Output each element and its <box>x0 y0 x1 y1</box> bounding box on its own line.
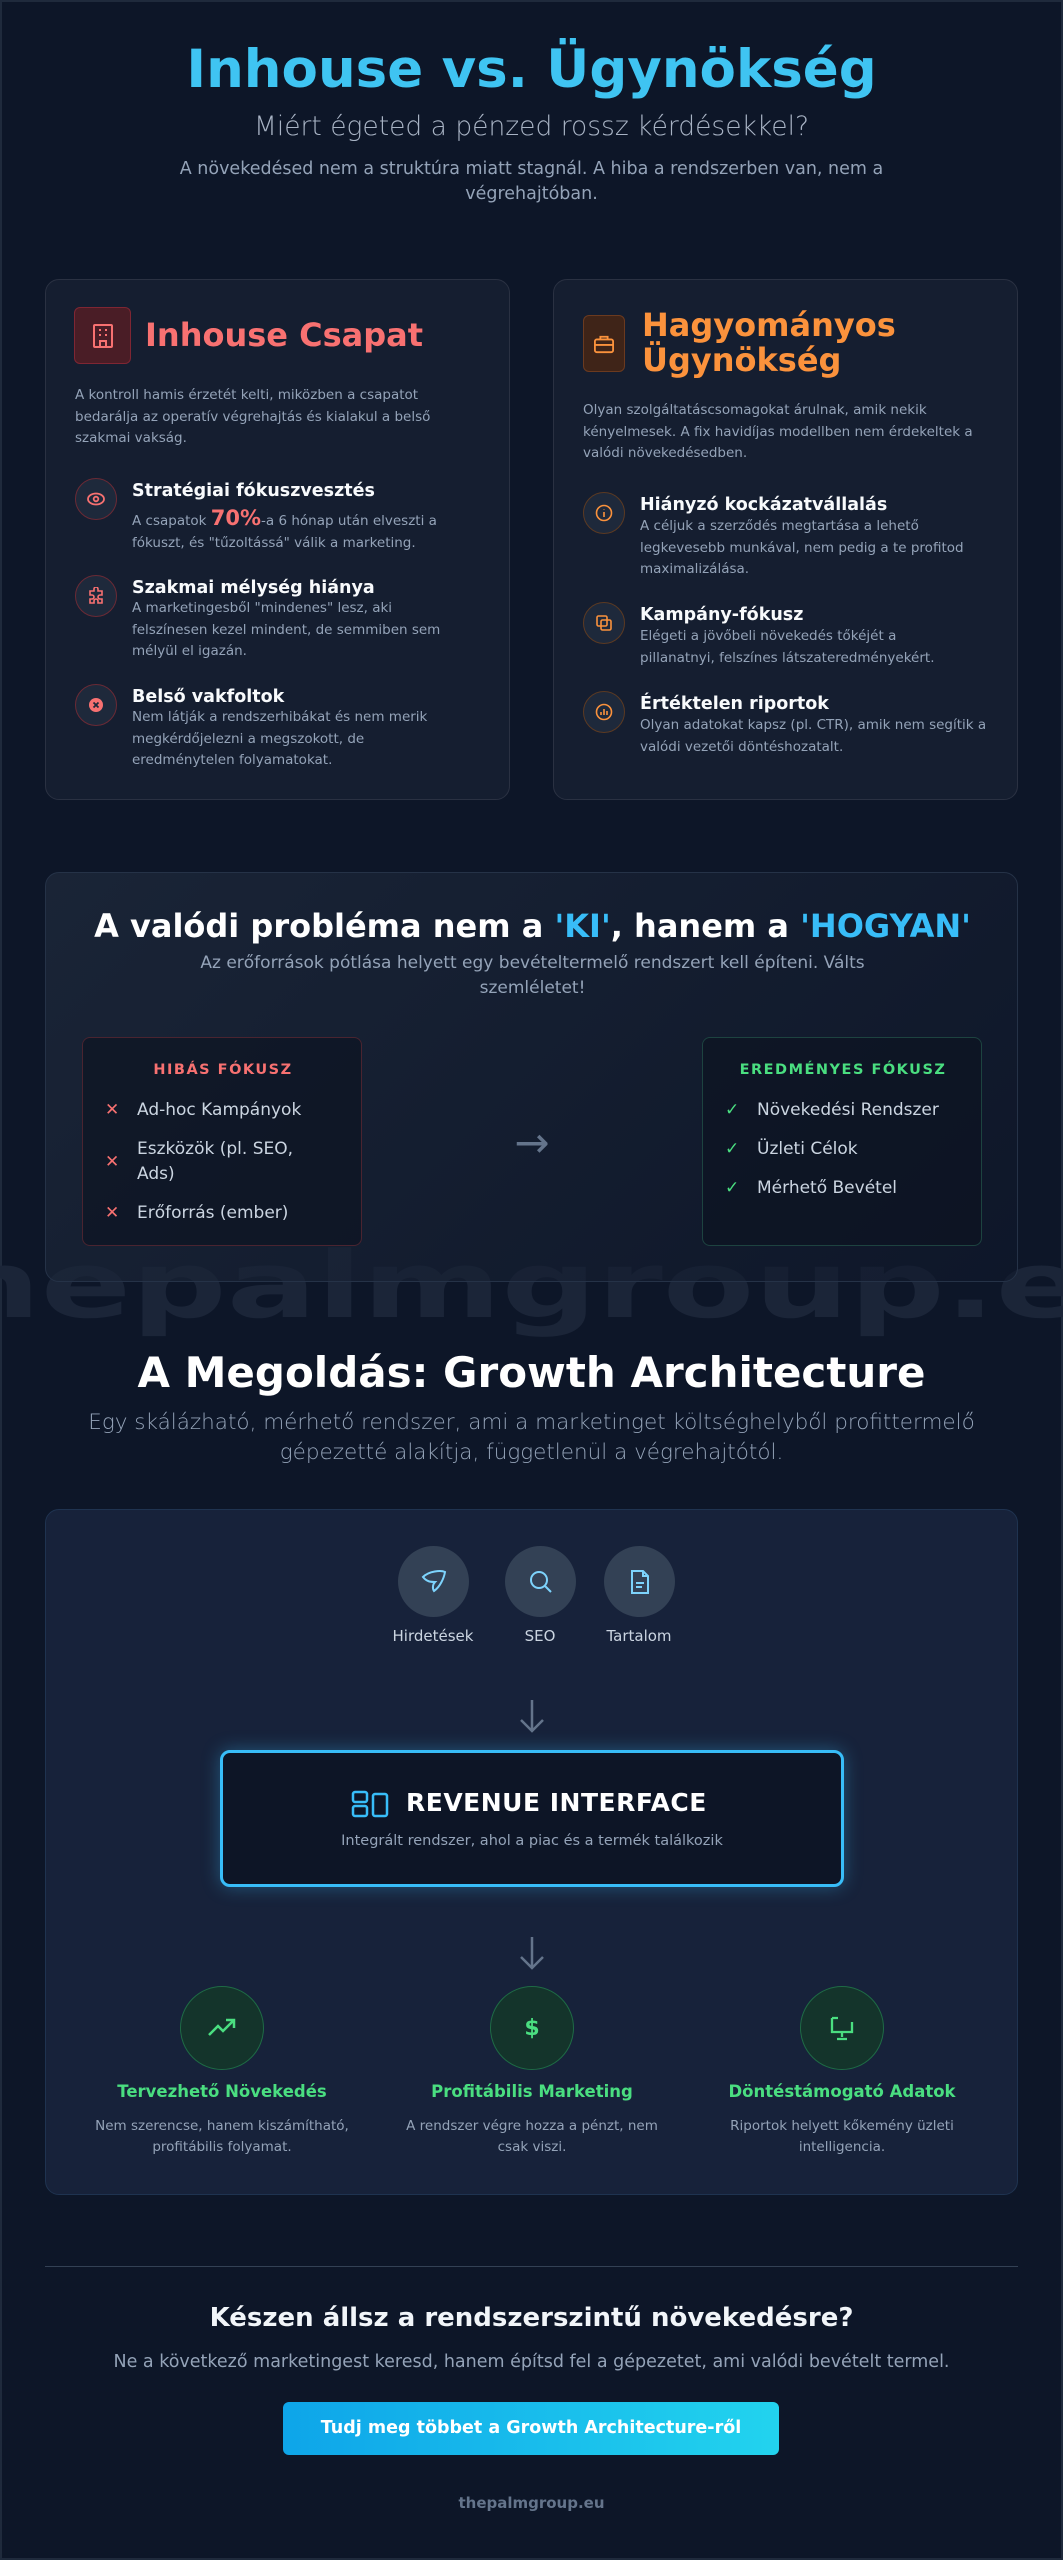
item: risk: Hiányzó kockázatvállalás <box>640 495 887 515</box>
box: wrong focus: Ad-hoc Kampányok <box>137 1100 301 1120</box>
item: risk <box>583 492 964 577</box>
icon: info <box>583 492 625 534</box>
revenue interface box <box>220 1750 844 1887</box>
box: effective focus: Mérhető Bevétel <box>757 1178 897 1198</box>
subtitle: Miért égeted a pénzed rossz kérdésekkel? <box>254 111 809 142</box>
icon: building <box>74 307 131 364</box>
result: profitable: A rendszer végre hozza a pénzt, nem csak viszi. <box>406 2118 658 2155</box>
panel: inhouse <box>45 279 510 800</box>
heading: Ügynökség <box>642 341 841 379</box>
icon: x circle <box>75 684 117 726</box>
heading: solution: A Megoldás: Growth Architecture <box>137 1348 926 1397</box>
box: wrong focus: Eszközök (pl. SEO, Ads) <box>137 1139 293 1184</box>
box: effective focus: EREDMÉNYES FÓKUSZ <box>740 1062 946 1078</box>
box: effective focus: Növekedési Rendszer <box>757 1100 939 1120</box>
result: profitable: Profitábilis Marketing <box>431 2082 633 2101</box>
subheading: Az erőforrások pótlása helyett egy bevételtermelő rendszert kell építeni. Válts szemléletet! <box>200 953 865 998</box>
item: blind spots: Nem látják a rendszerhibákat és nem merik megkérdőjelezni a megszokott, de eredménytelen folyamatokat. <box>132 709 427 768</box>
description: A kontroll hamis érzetét kelti, miközben a csapatot bedarálja az operatív végrehajtás és kialakul a belső szakmai vakság. <box>75 387 430 446</box>
cta heading: Készen állsz a rendszerszintű növekedésre? <box>210 2303 853 2333</box>
item: reports: Értéktelen riportok <box>640 694 829 714</box>
cta text: Ne a következő marketingest keresd, hanem építsd fel a gépezetet, ami valódi bevételt termel. <box>114 2352 950 2372</box>
cta button: Tudj meg többet a Growth Architecture-ről <box>321 2418 741 2438</box>
icon: ads <box>393 1546 474 1645</box>
item: campaign focus: Elégeti a jövőbeli növekedés tőkéjét a pillanatnyi, felszínes látszateredményekért. <box>640 628 934 666</box>
box: wrong focus: Erőforrás (ember) <box>137 1203 288 1223</box>
icon: puzzle <box>75 575 117 617</box>
icon: gauge <box>583 691 625 733</box>
item: campaign focus <box>583 602 934 666</box>
item: risk: A céljuk a szerződés megtartása a lehető legkevesebb munkával, nem pedig a te profitod maximalizálása. <box>640 518 964 577</box>
arrow: → <box>514 1118 550 1167</box>
item: blind spots <box>75 684 428 768</box>
box: wrong focus: ✕ <box>105 1152 119 1172</box>
item: strategic focus: Stratégiai fókuszvesztés <box>132 481 375 501</box>
icon: layout <box>352 1790 388 1818</box>
arrow down <box>520 1937 544 1970</box>
icon: seo: SEO <box>525 1627 555 1645</box>
item: professional depth: A marketingesből "mindenes" lesz, aki felszínesen kezel mindent, de semmiben sem mélyül el igazán. <box>132 600 440 659</box>
box: wrong focus: HIBÁS FÓKUSZ <box>153 1062 293 1078</box>
box: wrong focus: ✕ <box>105 1203 119 1223</box>
item: blind spots: Belső vakfoltok <box>132 687 284 707</box>
heading: Hagyományos <box>642 306 896 344</box>
panel: architecture diagram <box>45 1509 1018 2195</box>
box: effective focus: Üzleti Célok <box>757 1139 858 1159</box>
icon: content: Tartalom <box>606 1627 672 1645</box>
result: growth <box>95 1986 349 2155</box>
box: wrong focus: ✕ <box>105 1100 119 1120</box>
icon: content <box>604 1546 675 1645</box>
icon: copy <box>583 602 625 644</box>
item: strategic focus <box>75 478 437 550</box>
item: reports <box>583 691 986 754</box>
description: Olyan szolgáltatáscsomagokat árulnak, amik nekik kényelmesek. A fix havidíjas modellben nem érdekeltek a valódi növekedésedben. <box>583 402 973 461</box>
heading: A valódi probléma nem a 'KI', hanem a 'HOGYAN' <box>94 907 971 945</box>
result: data <box>728 1986 956 2155</box>
icon: briefcase <box>583 315 625 372</box>
box: effective focus: ✓ <box>725 1139 739 1159</box>
result: growth: Tervezhető Növekedés <box>117 2082 327 2101</box>
intro text: A növekedésed nem a struktúra miatt stagnál. A hiba a rendszerben van, nem a végrehajtóban. <box>180 159 883 204</box>
item: professional depth <box>75 575 440 659</box>
title: Inhouse vs. Ügynökség <box>186 39 877 100</box>
box: effective focus <box>702 1037 982 1246</box>
heading <box>642 306 896 379</box>
box: effective focus: ✓ <box>725 1178 739 1198</box>
icon: ads: Hirdetések <box>393 1627 473 1645</box>
revenue interface box: Integrált rendszer, ahol a piac és a termék találkozik <box>341 1833 723 1849</box>
box: effective focus: ✓ <box>725 1100 739 1120</box>
arrow down <box>520 1700 544 1733</box>
cta button <box>283 2402 779 2455</box>
footer: thepalmgroup.eu <box>458 2494 605 2512</box>
box: wrong focus <box>82 1037 362 1246</box>
item: strategic focus: A csapatok 70%-a 6 hónap után elveszti a fókuszt, és "tűzoltássá" válik a marketing. <box>132 506 437 550</box>
subheading: solution: Egy skálázható, mérhető rendszer, ami a marketinget költséghelyből profittermelő gépezetté alakítja, függetlenül a végrehajtótól. <box>88 1410 975 1465</box>
icon: seo <box>505 1546 576 1645</box>
heading: Inhouse Csapat <box>145 316 423 354</box>
item: professional depth: Szakmai mélység hiánya <box>132 578 375 598</box>
result: data: Döntéstámogató Adatok <box>728 2082 956 2101</box>
result: profitable <box>406 1986 658 2155</box>
panel: real problem <box>45 872 1018 1282</box>
result: profitable: $ <box>524 2016 540 2040</box>
item: reports: Olyan adatokat kapsz (pl. CTR), amik nem segítik a valódi vezetői döntéshozatalt. <box>640 717 986 754</box>
result: growth: Nem szerencse, hanem kiszámítható, profitábilis folyamat. <box>95 2118 349 2155</box>
result: data: Riportok helyett kőkemény üzleti intelligencia. <box>730 2118 954 2155</box>
item: campaign focus: Kampány-fókusz <box>640 605 803 625</box>
revenue interface box: REVENUE INTERFACE <box>406 1788 707 1817</box>
icon: eye <box>75 478 117 520</box>
panel: agency <box>553 279 1018 800</box>
